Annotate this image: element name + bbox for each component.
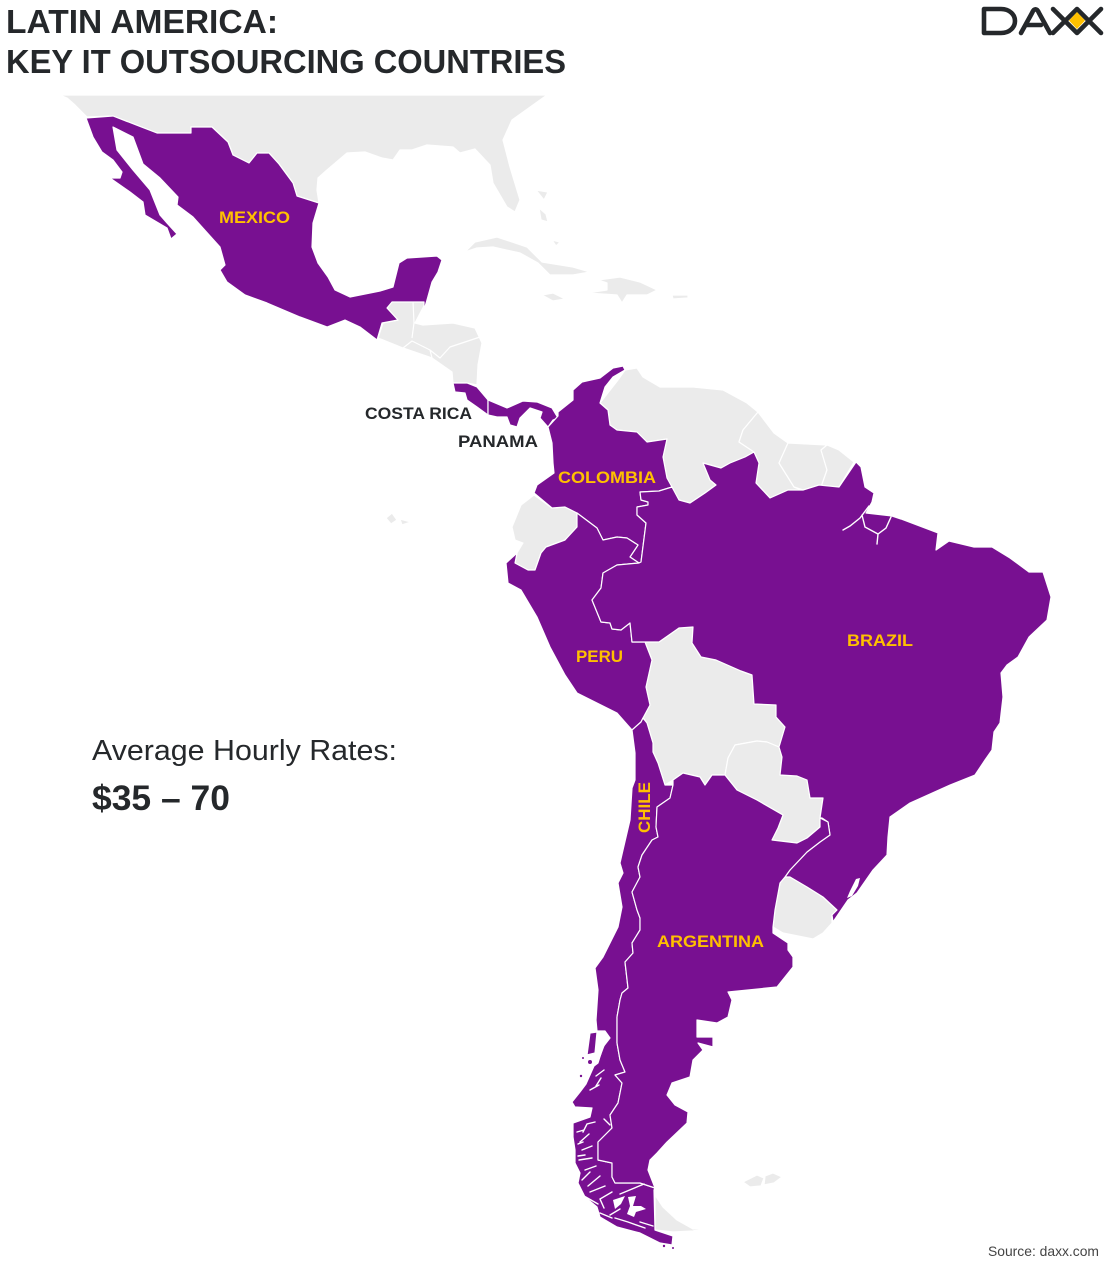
country label: Panama: PANAMA bbox=[458, 432, 538, 451]
logo: Daxx bbox=[984, 9, 1101, 33]
Falkland Islands bbox=[743, 1173, 782, 1187]
Argentina bbox=[598, 773, 830, 1188]
Galapagos bbox=[386, 513, 411, 525]
Peru bbox=[506, 513, 652, 730]
Bahamas bbox=[536, 190, 560, 246]
callout: average hourly rates: Average Hourly Rates: bbox=[92, 735, 397, 767]
Panama bbox=[488, 400, 558, 427]
title: KEY IT OUTSOURCING COUNTRIES bbox=[6, 43, 566, 80]
Central America bbox=[378, 300, 482, 385]
Brazil bbox=[592, 452, 1051, 922]
Ecuador bbox=[512, 495, 577, 570]
Chile bbox=[572, 718, 673, 1245]
small islands off southern Chile bbox=[580, 1057, 674, 1249]
Costa Rica bbox=[453, 383, 488, 415]
callout: average hourly rates: $35 – 70 bbox=[92, 779, 230, 818]
source note: Source: daxx.com bbox=[988, 1243, 1099, 1259]
country label: Colombia: COLOMBIA bbox=[558, 468, 656, 487]
grey neighbouring countries bbox=[60, 95, 854, 1232]
Colombia bbox=[534, 366, 672, 563]
Cuba bbox=[465, 237, 590, 275]
French Guiana bbox=[821, 445, 854, 487]
country label: Brazil: BRAZIL bbox=[847, 631, 913, 650]
Paraguay bbox=[725, 741, 823, 843]
country label: Argentina: ARGENTINA bbox=[657, 932, 764, 951]
southern Chile fjords and lagoon details bbox=[613, 878, 860, 1217]
Bolivia bbox=[643, 627, 785, 785]
title bbox=[6, 3, 566, 80]
callout: average hourly rates bbox=[92, 735, 397, 818]
country label: Chile: CHILE bbox=[635, 782, 654, 833]
Suriname bbox=[779, 443, 827, 490]
country label: Mexico: MEXICO bbox=[219, 208, 290, 227]
Venezuela bbox=[600, 368, 758, 503]
country label: Costa Rica: COSTA RICA bbox=[365, 404, 472, 423]
highlighted countries bbox=[86, 116, 1051, 1245]
Tierra del Fuego, Argentina bbox=[655, 1195, 710, 1232]
Puerto Rico bbox=[672, 295, 688, 299]
United States bbox=[60, 95, 547, 212]
Jamaica bbox=[542, 293, 565, 301]
country label: Peru: PERU bbox=[576, 647, 623, 666]
title: LATIN AMERICA: bbox=[6, 3, 278, 40]
Guyana bbox=[739, 412, 803, 498]
Uruguay bbox=[773, 877, 837, 939]
Hispaniola bbox=[587, 277, 657, 303]
Mexico bbox=[86, 116, 442, 340]
Chiloe Island bbox=[587, 1032, 597, 1055]
